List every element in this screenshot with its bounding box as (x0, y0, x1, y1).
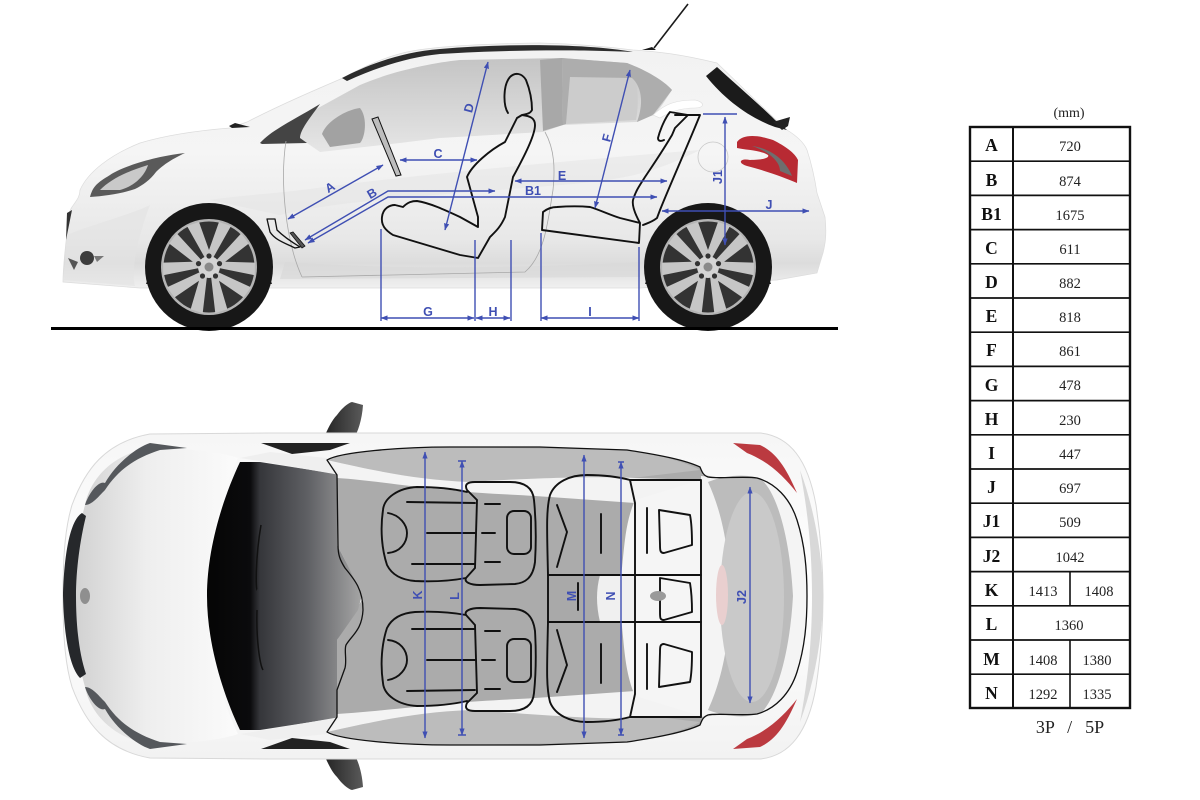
dimensions table: E (986, 306, 997, 326)
mirror base bottom (261, 738, 350, 749)
dimension I: I (588, 305, 592, 319)
dimensions table: J (987, 477, 996, 497)
dimension J: J (766, 198, 773, 212)
headlight top (85, 443, 187, 505)
dimensions table: 874 (1059, 174, 1082, 190)
mirror bottom (323, 752, 363, 790)
dimension J1 (703, 114, 737, 245)
dimension C: C (433, 147, 443, 161)
dimension K: K (411, 590, 425, 600)
ground line (51, 327, 838, 330)
mirror (322, 108, 365, 147)
dimension F (595, 70, 630, 208)
dimensions table: A (985, 135, 998, 155)
wheel arches (146, 238, 272, 284)
lower door shading (280, 262, 640, 279)
dimensions table: C (985, 238, 998, 258)
dimension F: F (599, 132, 615, 143)
upper front seat (382, 482, 536, 585)
front dark triangle (260, 104, 320, 144)
door legend: 3P / 5P (1036, 717, 1104, 737)
dimensions table: 1292 (1028, 687, 1058, 703)
side dimensions (288, 62, 809, 321)
dimensions table: 509 (1059, 515, 1081, 531)
rear seat lower half (547, 622, 701, 722)
body top view (63, 433, 823, 759)
dimensions table: 1360 (1054, 618, 1084, 634)
dimensions table: B (986, 170, 998, 190)
trunk white ring (701, 476, 807, 717)
dimension D: D (461, 102, 477, 114)
windscreen (207, 462, 362, 730)
dimensions table: H (985, 409, 999, 429)
dimension J2: J2 (735, 590, 749, 604)
dimensions table: 818 (1059, 310, 1081, 326)
dimensions table: 447 (1059, 447, 1081, 463)
dimension H (475, 240, 511, 321)
side seats outline (267, 74, 700, 258)
headlight (90, 153, 185, 197)
antenna (642, 4, 688, 50)
interior outline (327, 447, 807, 745)
front wheel (145, 203, 273, 331)
dimension M: M (565, 591, 579, 601)
top view seats (382, 475, 701, 722)
dimension L: L (448, 592, 462, 600)
dimension C (400, 147, 477, 161)
dimension G: G (423, 305, 433, 319)
dimensions table: 1408 (1028, 653, 1058, 669)
dimension H: H (488, 305, 498, 319)
door lines (284, 132, 554, 277)
dimensions table: J1 (983, 511, 1000, 531)
mirror top (323, 402, 363, 440)
rear spoiler tip (773, 117, 790, 130)
dimensions table: D (985, 272, 998, 292)
car body side (63, 43, 826, 288)
dimension B1: B1 (525, 184, 541, 198)
top view car (63, 402, 823, 790)
a pillar top (240, 452, 340, 475)
emblem (80, 588, 90, 604)
windows (260, 58, 672, 152)
dimension A: A (323, 179, 337, 196)
tail light (737, 136, 798, 183)
dimensions table: 1042 (1056, 550, 1084, 566)
dimensions table: L (986, 614, 997, 634)
rear seat upper half (547, 475, 701, 575)
dimensions table: K (985, 580, 999, 600)
dimension D (445, 62, 488, 230)
roof strip bottom (327, 691, 700, 732)
dimensions table: M (983, 649, 1000, 669)
dimension A (288, 165, 383, 219)
rear brake strip (716, 565, 728, 625)
dimensions table: F (986, 340, 997, 360)
dimensions table (970, 127, 1130, 708)
dimensions table: B1 (981, 204, 1002, 224)
headlight chrome (100, 165, 148, 190)
interior fill (327, 447, 807, 745)
grille (63, 513, 86, 678)
rear quarter window (566, 77, 638, 124)
dimensions table: I (988, 443, 995, 463)
hood (72, 449, 238, 743)
dimension I (541, 233, 639, 321)
rear edge shading (800, 470, 823, 722)
fog lamp (68, 251, 104, 270)
rear wheel (644, 203, 772, 331)
dimension J1: J1 (711, 170, 725, 184)
trunk (708, 476, 793, 716)
tail light top (733, 443, 797, 493)
lower front seat (382, 608, 536, 711)
dimension B: B (365, 185, 379, 202)
dimensions table: 1335 (1082, 687, 1112, 703)
unit label: (mm) (1053, 106, 1085, 121)
headlight bottom (85, 687, 187, 749)
side glass bottom (327, 708, 700, 745)
dimension B (305, 185, 495, 240)
dimensions table: 1380 (1082, 653, 1112, 669)
top dimensions (411, 452, 750, 738)
dimension N (604, 462, 624, 735)
dimensions table: 697 (1059, 481, 1081, 497)
quarter trim (653, 100, 702, 118)
rear arch (645, 238, 771, 284)
rear deck (618, 480, 700, 716)
wipers (256, 525, 263, 670)
dimensions table: 861 (1059, 344, 1081, 360)
wiper (229, 123, 250, 128)
dimension E: E (558, 169, 566, 183)
trunk panel (720, 492, 784, 702)
rear seat (542, 112, 700, 243)
roof rail (342, 45, 633, 81)
front bumper shading (64, 205, 150, 286)
dimensions table: 882 (1059, 276, 1081, 292)
pillar post (372, 117, 401, 176)
quarter window dark panel (562, 58, 672, 125)
dimension L (448, 461, 466, 735)
dimension B1 (308, 184, 657, 243)
dimensions table: J2 (983, 546, 1000, 566)
dimensions table: 1408 (1084, 584, 1114, 600)
grille side (66, 210, 72, 240)
dimensions table: 1675 (1056, 208, 1084, 224)
rear hatch glass (706, 67, 787, 130)
side glass top (327, 447, 700, 484)
dimensions table: N (985, 683, 998, 703)
rear seat centre (548, 575, 701, 622)
dimensions table: 611 (1059, 242, 1081, 258)
dimension G (381, 229, 474, 321)
dimension N: N (604, 591, 618, 601)
front seat (382, 74, 535, 258)
roof strip top (327, 460, 700, 503)
dimensions table: 720 (1059, 139, 1081, 155)
b pillar (540, 58, 563, 131)
seat accessory pedals (267, 219, 300, 248)
dimensions table: 1413 (1028, 584, 1058, 600)
mirror base top (261, 443, 350, 454)
shoulder shading (210, 150, 700, 215)
tail light bottom (733, 699, 797, 749)
side view car (51, 4, 838, 331)
pedal bar (290, 232, 305, 248)
dimensions table: 478 (1059, 378, 1081, 394)
dimensions table: 230 (1059, 413, 1081, 429)
dimensions table: G (985, 375, 999, 395)
a pillar bottom (240, 717, 340, 740)
fuel cap (698, 142, 728, 172)
